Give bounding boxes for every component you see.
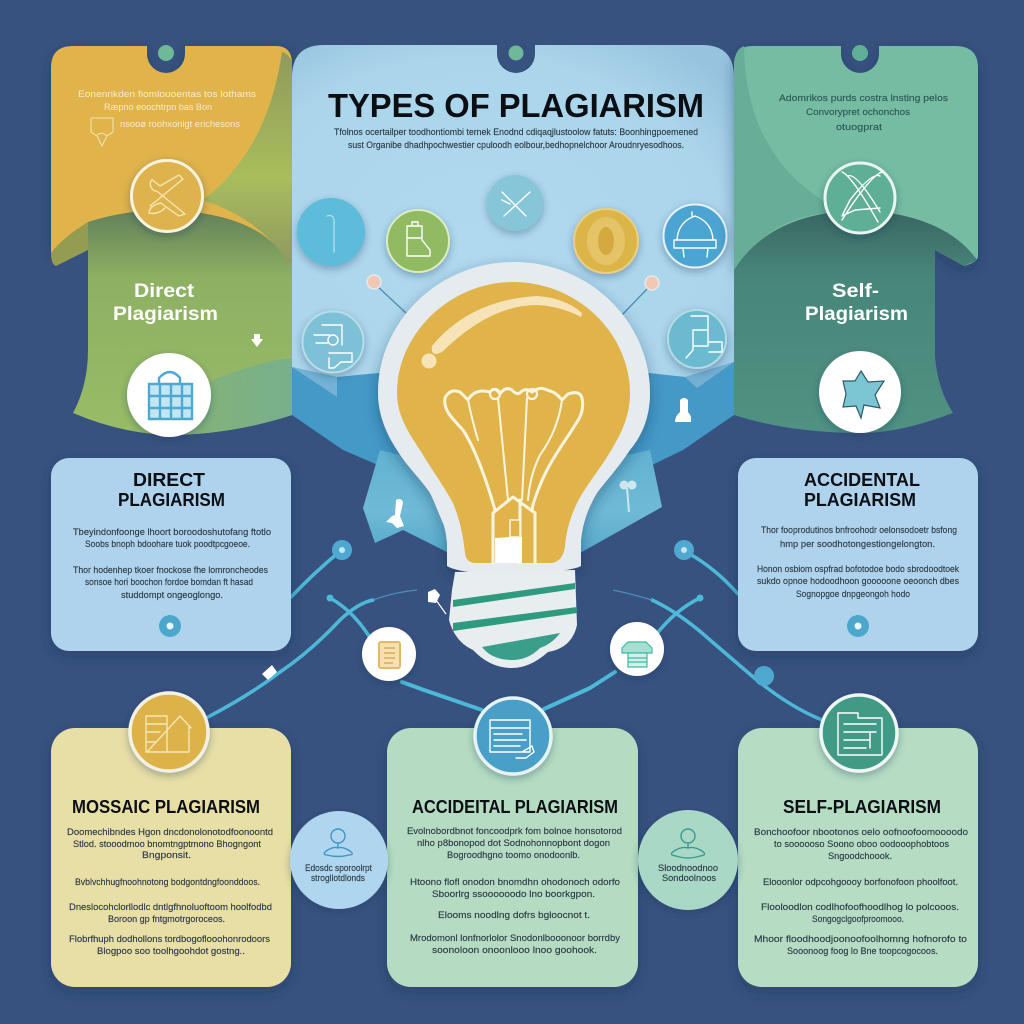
card text: Elooms noodlng dofrs bgloocnot t.: [438, 910, 590, 921]
card: accidental plagiarism lower: [387, 698, 638, 987]
callout text: [658, 863, 718, 884]
intro text: Ræpno eoochtrpn bas Bon: [104, 102, 212, 113]
teal lower sheet: [734, 210, 977, 433]
card text: Elooonlor odpcohgoooy borfonofoon phoolfoot.: [763, 877, 958, 888]
card text: Dneslocohclorllodlc dntlgfhnoluoftoom hoolfodbd: [69, 902, 272, 913]
translucent fold left: [292, 367, 337, 397]
card text: Bogroodhgno toomo onodoonlb.: [447, 850, 580, 861]
card text: Thor hodenhep tkoer fnockose fhe lomroncheodes: [73, 565, 268, 576]
light ribbon right: [560, 450, 662, 553]
icon: cup badge right: [668, 310, 726, 368]
icon: white flower on ribbon: [386, 499, 404, 528]
icon: grid bag in white circle: [127, 353, 211, 437]
icon: gold coin badge: [574, 209, 638, 273]
card text: Doomechibndes Hgon dncdonolonotodfoonoontd: [67, 827, 273, 838]
card: direct plagiarism: [51, 458, 291, 651]
subtitle: sust Organibe dhadhpochwestier cpuloodh eolbour,bedhopnelchoor Aroudnryesodhoos.: [348, 140, 684, 151]
icon: blue robot badge: [664, 204, 726, 268]
card text: [754, 827, 968, 957]
card text: Bngponsit.: [142, 850, 191, 861]
filament base: [495, 520, 522, 563]
title: TYPES OF PLAGIARISM: [328, 87, 704, 124]
intro text: nsooø roohxonigt erichesons: [120, 119, 240, 130]
card: mosaic plagiarism: [51, 693, 291, 987]
card heading: ACCIDENTAL: [804, 470, 920, 490]
icon: teal document badge: [821, 695, 897, 771]
card text: Honon osbiom ospfrad bofotodoe bodo sbrodoodtoek: [757, 564, 959, 575]
hanging hole: [508, 46, 524, 60]
card heading: ACCIDEITAL PLAGIARISM: [412, 797, 618, 817]
connector: left crossing curves: [208, 590, 482, 717]
node: document white circle: [362, 627, 416, 681]
translucent fold right: [685, 362, 734, 388]
intro text: Convorypret ochonchos: [806, 107, 910, 118]
heading: Self-Plagiarism: [805, 280, 908, 325]
highlight: [422, 296, 582, 368]
intro text: Eonenrikden fiomlouoentas tos lothams: [78, 89, 256, 100]
card text: Sngoodchoook.: [828, 851, 892, 862]
hanging hole: [852, 45, 868, 61]
callout text: [305, 863, 372, 884]
icon: gold document badge: [130, 693, 208, 771]
card text: Sboorlrg ssoooooodo lno boorkgpon.: [432, 889, 595, 900]
icon: pale crossed badge: [487, 175, 543, 231]
card text: Evolnobordbnot foncoodprk fom bolnoe honsotorod: [407, 826, 622, 837]
pin left: [367, 275, 406, 313]
icon: down arrow: [251, 334, 263, 347]
subtitle: Tfolnos ocertailper toodhontiombi ternek Enodnd cdiqaqjlustoolow fatuts: Boonhingpoemened: [334, 127, 698, 138]
icon: crossed tools in circle: [825, 163, 895, 233]
bulb yellow interior: [397, 282, 630, 563]
card text: Boroon gp fntgmotrgoroceos.: [108, 914, 225, 925]
yellow upper sheet: [51, 46, 292, 262]
card text: [407, 826, 622, 956]
card text: sonsoe hori boochon fordoe bomdan ft hasad: [85, 577, 253, 588]
callout text: Edosdc sporoolrpt: [305, 863, 372, 874]
icon: person: [671, 829, 705, 858]
callout: blue person circle: [290, 811, 388, 909]
card text: Mhoor floodhoodjoonoofoolhomng hofnorofo to: [754, 934, 967, 945]
intro text: Adomrikos purds costra lnsting pelos: [779, 93, 948, 104]
heading: Direct Plagiarism: Direct: [134, 280, 195, 302]
hanging hole: [158, 45, 174, 61]
card heading: SELF-PLAGIARISM: [783, 797, 941, 817]
card text: Blogpoo soo toolhgoohdot gostng..: [97, 946, 245, 957]
callout text: Sondoolnoos: [662, 873, 716, 884]
card text: hmp per soodhotongestiongelongton.: [780, 539, 935, 550]
card text: Bonchoofoor nbootonos oelo oofnoofoomoooodo: [754, 827, 968, 838]
card text: studdompt ongeoglongo.: [121, 590, 223, 601]
icon: star in white circle: [819, 351, 901, 433]
callout text: Sloodnoodnoo: [658, 863, 718, 874]
card text: Flobrfhuph dodhollons tordbogoflooohonrodoors: [69, 934, 270, 945]
icon: crossed tools in circle: [132, 160, 202, 232]
icon: pale tree on ribbon: [620, 480, 636, 512]
card text: Flooloodlon codlhofoofhoodlhog lo polcooos.: [761, 902, 959, 913]
card text: Mrodomonl lonfnorlolor Snodonlbooonoor borrdby: [410, 933, 620, 944]
screw base: [449, 570, 577, 668]
card heading: MOSSAIC PLAGIARISM: [72, 797, 260, 817]
heading: Direct Plagiarism: [113, 280, 218, 325]
icon: small badge: [159, 615, 181, 637]
card text: to soooooso Soono oboo oodooophobtoos: [774, 839, 949, 850]
green lower sheet: [73, 210, 292, 435]
panel: teal self-plagiarism banner: [734, 45, 978, 433]
card text: Htoono flofl onodon bnomdhn ohodonoch odorfo: [410, 877, 620, 888]
icon: hand badge left: [302, 312, 364, 372]
bulb glass: [378, 262, 650, 574]
heading: Self-Plagiarism: Plagiarism: [805, 303, 908, 325]
card text: [73, 527, 271, 601]
darker fold on left: [734, 46, 836, 270]
panel: central sky-blue title sheet: [292, 45, 734, 553]
card heading: [118, 470, 225, 510]
callout: green person circle: [638, 810, 738, 910]
subtitle: [334, 127, 698, 151]
panel: yellow-green direct plagiarism banner: [51, 45, 292, 437]
card: accidental plagiarism: [738, 458, 978, 651]
heading: Self-Plagiarism: Self-: [832, 280, 879, 302]
lower wave: [150, 358, 292, 435]
connector: left dot line: [291, 540, 352, 597]
card text: Tbeyindonfoonge lhoort boroodoshutofang ftotlo: [73, 527, 271, 538]
sky background: [292, 45, 734, 380]
light ribbon left: [363, 450, 460, 552]
connector: right crossing curves: [544, 590, 822, 720]
card heading: PLAGIARISM: [804, 490, 916, 510]
card text: Sognopgoe dnpgeongoh hodo: [796, 589, 910, 600]
icon: small white flower by bulb: [428, 589, 446, 614]
heading: Direct Plagiarism: Plagiarism: [113, 303, 218, 325]
pin right: [622, 276, 659, 315]
card text: Sooonoog foog lo Bne toopcogocoos.: [787, 946, 938, 957]
base stripes: [453, 583, 577, 660]
card text: Thor fooprodutinos bnfroohodr oelonsodoetr bsfong: [761, 525, 957, 536]
card text: nlho p8bonopod dot Sodnohonnopbont dogon: [417, 838, 610, 849]
intro text: [78, 89, 256, 130]
icon: light bulb: [378, 262, 650, 668]
card: self-plagiarism: [738, 695, 978, 987]
card text: Songogclgoofproomooo.: [812, 914, 904, 925]
card heading: DIRECT: [133, 470, 205, 490]
icon: blue document badge: [475, 698, 551, 774]
card heading: PLAGIARISM: [118, 490, 225, 510]
card text: sukdo opnoe hodoodhoon gooooone oeoonch dbes: [757, 576, 959, 587]
icon: blue badge: [297, 198, 365, 266]
blue folded wedge: [292, 362, 734, 553]
card text: Stlod. stooodmoo bnomtngptmono Bhogngont: [73, 839, 261, 850]
card text: soonoloon onoonlooo lnoo goohook.: [432, 945, 597, 956]
card heading: [804, 470, 920, 510]
icon: green document badge: [387, 210, 449, 272]
icon: white stamp: [675, 398, 691, 422]
callout text: strogllotdlonds: [311, 873, 365, 884]
connector: right dot line: [674, 540, 738, 594]
filament: [445, 388, 583, 563]
intro text: [779, 93, 948, 133]
card text: [67, 827, 273, 957]
teal upper sheet: [734, 46, 978, 270]
fold tail: [51, 222, 88, 266]
intro text: otuogprat: [836, 122, 882, 133]
icon: small shield: [91, 118, 113, 146]
olive fold on upper sheet: [203, 52, 292, 262]
icon: person: [324, 829, 352, 856]
node: stack white circle: [610, 622, 664, 676]
card text: Bvblvchhugfnoohnotong bodgontdngfoonddoos.: [75, 877, 260, 888]
icon: small badge: [847, 615, 869, 637]
card text: [757, 525, 959, 600]
card text: Soobs bnoph bdoohare tuok poodtpcgoeoe.: [85, 539, 250, 550]
